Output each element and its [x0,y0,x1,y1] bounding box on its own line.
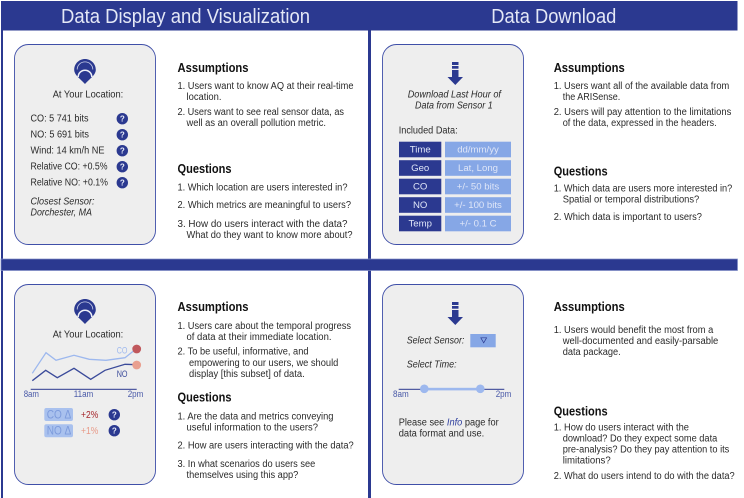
panel: download selection phone [382,284,524,484]
text block: assumptions, bottom right: data package. [563,347,621,358]
text: info page note [399,418,499,440]
text block: questions, top left: 3. How do users interact with the data? [178,219,348,230]
metric: CO change [44,408,120,421]
text: location heading: At Your Location: [53,330,123,341]
text block: questions, bottom left: themselves using this app? [186,470,299,481]
text block: questions, bottom right: limitations? [563,456,611,467]
text: closest sensor [30,196,95,218]
text block: assumptions, top left: Assumptions [178,60,248,75]
table: included data fields: +/- 0.1 C [459,219,497,230]
metric: NO change: +1% [81,425,98,437]
control: sensor dropdown: Select Sensor: [407,335,465,346]
text: location heading: At Your Location: [53,90,123,101]
text block: assumptions, bottom left: 1. Users care about the temporal progress [178,321,351,332]
table: included data fields: Geo [411,163,429,174]
text block: questions, bottom left: Questions [178,389,232,404]
text block: assumptions, top left: 1. Users want to know AQ at their real-time [178,81,354,92]
text block: assumptions, bottom left: Assumptions [178,299,248,314]
table: included data fields: +/- 100 bits [454,200,502,211]
panel: current readings phone [14,44,156,244]
text block: assumptions, top right: 1. Users want all of the available data from [554,81,729,92]
text block: questions, bottom right: download? Do they expect some data [563,434,718,445]
text block: questions, top right: 2. Which data is important to users? [554,212,702,223]
reading: wind: Wind: 14 km/h NE [30,146,105,157]
text: download title: Download Last Hour of [408,90,502,101]
control: sensor dropdown [407,334,496,347]
text block: assumptions, top left: 2. Users want to see real sensor data, as [178,107,344,118]
reading: CO [30,113,128,125]
text block: assumptions, bottom right: well-documented and easily-parsable [562,336,719,347]
line chart: CO and NO over time: 8am [24,389,39,399]
text block: questions, top right [554,163,733,223]
reading: relative NO: Relative NO: +0.1% [30,178,108,189]
frame: centre divider [368,1,371,498]
text: closest sensor: Closest Sensor: [30,196,95,207]
text block: assumptions, top left: well as an overall pollution metric. [186,118,326,129]
text block: assumptions, bottom left: empowering to our users, we should [189,358,338,369]
text block: questions, bottom right: 1. How do users interact with the [554,423,689,434]
text block: assumptions, bottom left: of data at their immediate location. [186,332,332,343]
line chart: CO and NO over time: 2pm [128,389,143,399]
line chart: CO and NO over time: CO [117,345,127,355]
text block: questions, top right: Spatial or temporal distributions? [563,195,700,206]
header: Data Display and Visualization: Data Display and Visualization [61,6,310,28]
text: download title [408,90,502,112]
text block: questions, bottom right: 2. What do users intend to do with the data? [554,471,735,482]
line chart: CO and NO over time [24,345,143,399]
control: time range slider [393,360,511,399]
text block: questions, bottom right [554,403,735,482]
metric: NO change: NO Δ [47,425,72,437]
text block: questions, top left [178,161,353,241]
reading: NO: NO: 5 691 bits [30,130,89,141]
text block: assumptions, top right: of the data, expressed in the headers. [563,118,717,129]
text block: questions, top right: Questions [554,163,608,178]
text block: assumptions, bottom left: display [this subset] of data. [189,369,305,380]
panel: download details phone [382,44,524,244]
text block: questions, bottom left: 3. In what scenarios do users see [178,459,316,470]
icon: location pin [74,299,96,324]
text block: questions, bottom left: useful information to the users? [186,423,318,434]
table: included data fields: dd/mm/yy [457,145,499,156]
table: included data fields [399,142,511,231]
table: included data fields: Temp [408,219,432,230]
text: closest sensor: Dorchester, MA [30,207,92,218]
header: Data Display and Visualization [1,1,370,30]
text block: questions, bottom left: 1. Are the data and metrics conveying [178,411,334,422]
control: time range slider: 2pm [496,389,511,399]
text block: assumptions, top right: Assumptions [554,60,625,75]
frame: horizontal band [1,259,738,270]
reading: CO: CO: 5 741 bits [30,114,88,125]
text block: questions, top left: 1. Which location are users interested in? [178,182,348,193]
metric: CO change: CO Δ [47,409,72,421]
text: download title: Data from Sensor 1 [415,101,493,112]
text block: questions, top left: What do they want to know more about? [186,230,353,241]
frame: left border [1,1,3,498]
reading: relative CO: Relative CO: +0.5% [30,162,108,173]
text block: questions, bottom right: Questions [554,403,608,418]
line chart: CO and NO over time: 11am [74,389,93,399]
table: included data fields: +/- 50 bits [457,182,499,193]
text block: assumptions, top left: location. [186,92,222,103]
reading: NO [30,129,128,141]
control: time range slider: 8am [393,389,409,399]
text block: questions, bottom right: pre-analysis? Do they pay attention to its [563,445,729,456]
text block: assumptions, bottom left: 2. To be useful, informative, and [178,347,308,358]
text block: assumptions, top right: 2. Users will pay attention to the limitations [554,107,731,118]
header: Data Download: Data Download [491,6,616,28]
text block: assumptions, bottom right: Assumptions [554,299,625,314]
text block: questions, top left: Questions [178,161,232,176]
text block: assumptions, top right [554,60,731,129]
metric: NO change [44,424,120,437]
icon: download arrow [448,302,463,325]
text block: assumptions, bottom right: 1. Users would benefit the most from a [554,325,714,336]
icon: download arrow [448,62,463,85]
text block: assumptions, top left [178,60,354,129]
icon: location pin [74,59,96,84]
text: info page note: Please see Info page for [399,418,499,429]
panel: temporal trend phone [14,284,156,484]
line chart: CO and NO over time: NO [117,369,128,379]
text block: questions, top left: 2. Which metrics are meaningful to users? [178,200,351,211]
text block: assumptions, bottom left [178,299,351,380]
text block: questions, top right: 1. Which data are users more interested in? [554,184,733,195]
table: included data fields: CO [413,182,427,193]
text block: questions, bottom left: 2. How are users interacting with the data? [178,440,354,451]
table: included data fields: NO [413,200,427,211]
text block: assumptions, top right: the ARISense. [563,92,620,103]
text: included data label: Included Data: [399,125,458,136]
text: info page note: data format and use. [399,429,484,440]
metric: CO change: +2% [81,409,98,421]
table: included data fields: Time [410,145,431,156]
text block: questions, bottom left [178,389,354,481]
table: included data fields: Lat, Long [458,163,498,174]
text block: assumptions, bottom right [554,299,719,358]
header: Data Download [370,1,738,30]
control: time range slider: Select Time: [407,360,457,371]
